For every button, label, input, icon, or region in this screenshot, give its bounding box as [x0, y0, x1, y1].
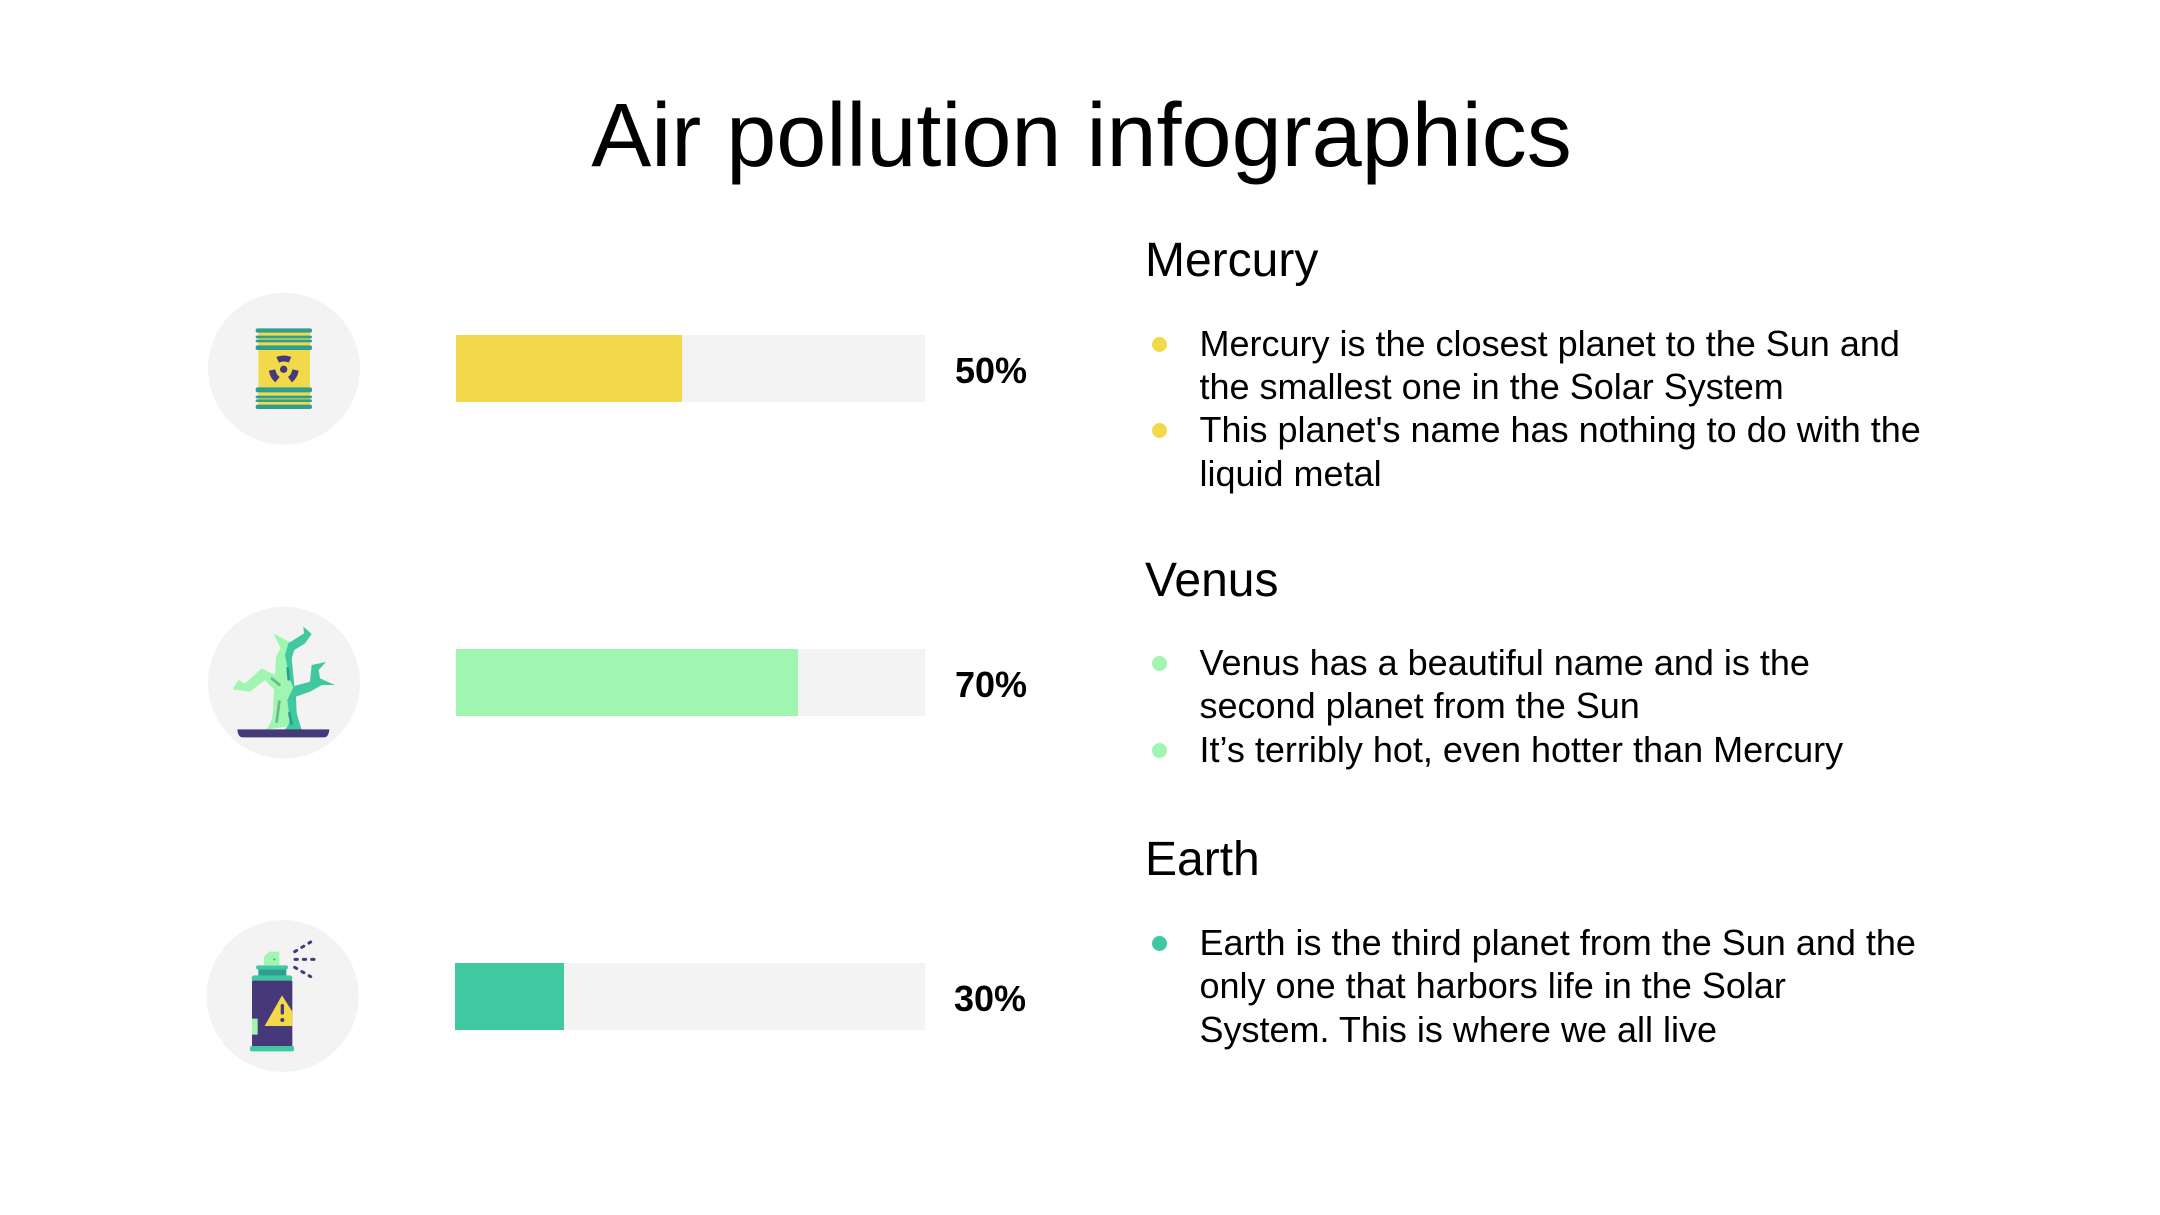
text: Mercury bullets — [1152, 322, 1921, 494]
text: Venus bullets: second planet from the Sun — [1200, 685, 1640, 726]
icon: dead tree — [208, 606, 360, 758]
heading: Venus: Venus — [1145, 554, 1278, 607]
heading: Mercury: Mercury — [1145, 234, 1318, 287]
text: Mercury bullets: the smallest one in the Solar System — [1200, 366, 1784, 407]
text: Earth bullets: Earth is the third planet from the Sun and the — [1200, 922, 1916, 963]
value: 50%: 50% — [955, 350, 1027, 391]
bar: 30% — [455, 963, 925, 1030]
title: Air pollution infographics — [591, 86, 1572, 186]
value: 30%: 30% — [954, 978, 1026, 1019]
icon: spray can — [207, 920, 358, 1072]
text: Venus bullets: It’s terribly hot, even hotter than Mercury — [1200, 729, 1843, 770]
text: Mercury bullets: This planet's name has nothing to do with the — [1200, 409, 1921, 450]
text: Mercury bullets: liquid metal — [1200, 453, 1382, 494]
icon: radioactive barrel — [208, 292, 360, 444]
value: 70%: 70% — [955, 664, 1027, 705]
text: Venus bullets — [1152, 642, 1843, 770]
text: Venus bullets: Venus has a beautiful name and is the — [1200, 642, 1810, 683]
text: Earth bullets: System. This is where we all live — [1200, 1009, 1717, 1050]
bar: 70% — [456, 649, 925, 716]
text: Earth bullets — [1152, 922, 1916, 1050]
text: Earth bullets: only one that harbors life in the Solar — [1200, 965, 1786, 1006]
heading: Earth: Earth — [1145, 833, 1260, 886]
bar: 50% — [456, 335, 925, 402]
text: Mercury bullets: Mercury is the closest planet to the Sun and — [1200, 322, 1900, 364]
